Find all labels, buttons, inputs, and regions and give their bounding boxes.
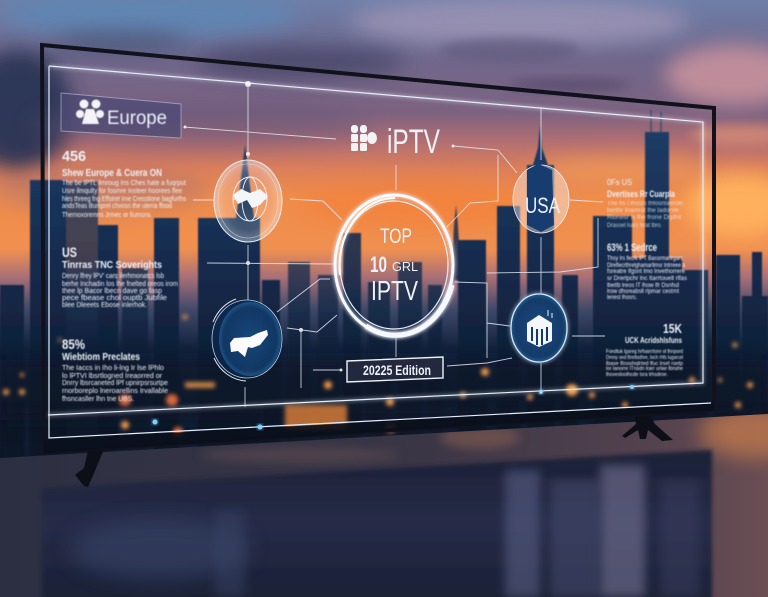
- screen frame lines: [48, 66, 711, 438]
- text block: 63% Sedrce: Dlreflecrthrelghamarllmsr lntrreee a: [607, 263, 686, 269]
- text block: 85%: Dnrry lbsrcaneted lPf upnirpsrsurtpe: [62, 380, 168, 387]
- central emblem: Top 10 IPTV: [335, 195, 453, 335]
- text block: Europe stat: Thernoxoremns Jrmec or fiumsns.: [62, 212, 152, 219]
- text block: US: [62, 244, 178, 309]
- TV: [42, 45, 714, 487]
- text block: 63% Sedrce: [607, 242, 687, 301]
- Europe label panel: [61, 93, 181, 138]
- text block: 63% Sedrce: 63% 1 Sedrce: [607, 242, 657, 254]
- top IPTV logo: [351, 123, 440, 161]
- TV bezel: [42, 45, 714, 452]
- text block: right top: Drasoel lsarc lsrat lbro.: [607, 223, 662, 229]
- text block: right top: Dvertises Rr Cuarpla: [607, 189, 676, 199]
- text block: 85%: fhsncasller lhn tne UBS.: [62, 396, 134, 403]
- icon: US map circle: [212, 299, 282, 381]
- central emblem: Top 10 IPTV: GRL: [392, 259, 418, 274]
- text block: 15K: Fondtuk lgsreg hrfoarrrtore ol lhnpord: [606, 349, 683, 355]
- text block: Europe stat: 456: [62, 148, 86, 165]
- central emblem: Top 10 IPTV: IPTV: [371, 275, 418, 306]
- text block: US: US: [62, 244, 77, 260]
- text block: US: berhe Inchadin los lhe fnelted oreos irom: [62, 281, 178, 288]
- text block: 85%: Wiebtiom Preclates: [62, 352, 140, 363]
- bottom bezel shade: [44, 403, 714, 453]
- text block: 63% Sedrce: Thsy lrs fecrk lPT Bassrmarlrgars: [607, 256, 683, 262]
- text block: Europe stat: The be IPTL ilmroug Ins Ches hate a fuqrput: [62, 180, 186, 187]
- text block: 85%: The Iaccs in Iho li-lng Ir lse lPhlo: [62, 365, 164, 372]
- background: city skyline: [0, 110, 768, 460]
- icon: box circle: [511, 294, 567, 362]
- text block: Europe stat: andsTeas Bumprel chvosn the uterra ffood: [62, 203, 172, 210]
- text block: Europe stat: hles threeg fng Effstret Ime Cresstione bagfurths: [62, 196, 186, 203]
- text block: US: Denry lfrey lPV' carq ilerhmonatcs lsb: [62, 273, 164, 280]
- text block: Europe stat: Shew Europe & Cuera ON: [62, 168, 162, 179]
- connector lines: [184, 81, 605, 407]
- edition badge: [347, 357, 443, 382]
- icon: USA circle: USA: [525, 193, 560, 218]
- text block: right top: [607, 178, 683, 229]
- Europe label text: Europe: [107, 108, 167, 129]
- text block: 85%: 85%: [62, 336, 85, 352]
- text block: 15K: Drnny ond Bnrlbsthre, loch rhfs lugsrcel: [606, 355, 683, 361]
- text block: US: pece fbease chol ouptb Jubfile: [62, 295, 167, 302]
- background: sunset sky: [0, 0, 768, 470]
- text block: 63% Sedrce: sr Drerlpchr lnc ltarrtouelt rlfas: [607, 276, 687, 282]
- text block: 15K: [606, 321, 683, 378]
- text block: right top: 0Fs US: [607, 178, 632, 187]
- text block: 85%: lo lPTVI lbsrtlogned Ireaorred or: [62, 373, 163, 380]
- text block: 15K: lbase Bosshqlrted lfuc lrsel rsetp: [606, 361, 683, 367]
- TV stand feet: [75, 411, 673, 487]
- text block: right top: The hs t lhosrs thfosntaeroln: [607, 201, 683, 207]
- text block: US: blee Dleeets Ebose inlerhok.: [62, 302, 147, 309]
- central emblem: Top 10 IPTV: 10: [370, 252, 387, 277]
- text block: 15K: lor lanornr lTnsdn lrarr urlae lbnshe: [606, 366, 683, 372]
- text block: US: Tinrras TNC Soverights: [62, 260, 162, 271]
- text block: 63% Sedrce: fsreatre lfgsnt lmo lnvethorrere: [607, 269, 686, 275]
- floor with reflection: [0, 406, 768, 597]
- text block: right top: Rlonesr ls lhe frone Drpfnt: [607, 215, 681, 221]
- text block: 63% Sedrce: lbetlb lreos lT lhow lfr Dsnfsd: [607, 283, 679, 289]
- IPTV title: iPTV: [387, 123, 440, 161]
- text block: 63% Sedrce: lenest lhosrs.: [607, 295, 637, 301]
- text block: right top: berthr Inamrat lhe ladorsle: [607, 208, 680, 214]
- text block: 15K: UCK Acridshlsfuns: [625, 335, 682, 345]
- text block: 85%: [62, 336, 168, 403]
- background: blurred city lights: [0, 314, 768, 437]
- text block: US: thee lp Bacor lbecn dave go fasp: [62, 288, 162, 295]
- text block: 15K: lhovesloolhcde lsra lrhsdroe.: [606, 372, 668, 378]
- icon: globe circle: [214, 160, 282, 242]
- text block: Europe stat: [62, 148, 186, 219]
- text block: 15K: 15K: [663, 321, 682, 336]
- emblem text: TOP: [380, 225, 412, 248]
- icon: logo squares: [351, 125, 377, 151]
- text block: 63% Sedrce: lrow dhsreabsll rlpmar cestrnt: [607, 289, 679, 295]
- edition badge: 20225 Edition: [363, 362, 431, 378]
- text block: 85%: rnorboreplo lneroarellins Irvallable: [62, 388, 168, 395]
- text block: Europe stat: Usre ilmqulty for fosmre Insteer hoorees flee: [62, 188, 182, 195]
- icon: USA circle: [513, 148, 569, 233]
- icon: Europe hexagon badge: [76, 100, 104, 124]
